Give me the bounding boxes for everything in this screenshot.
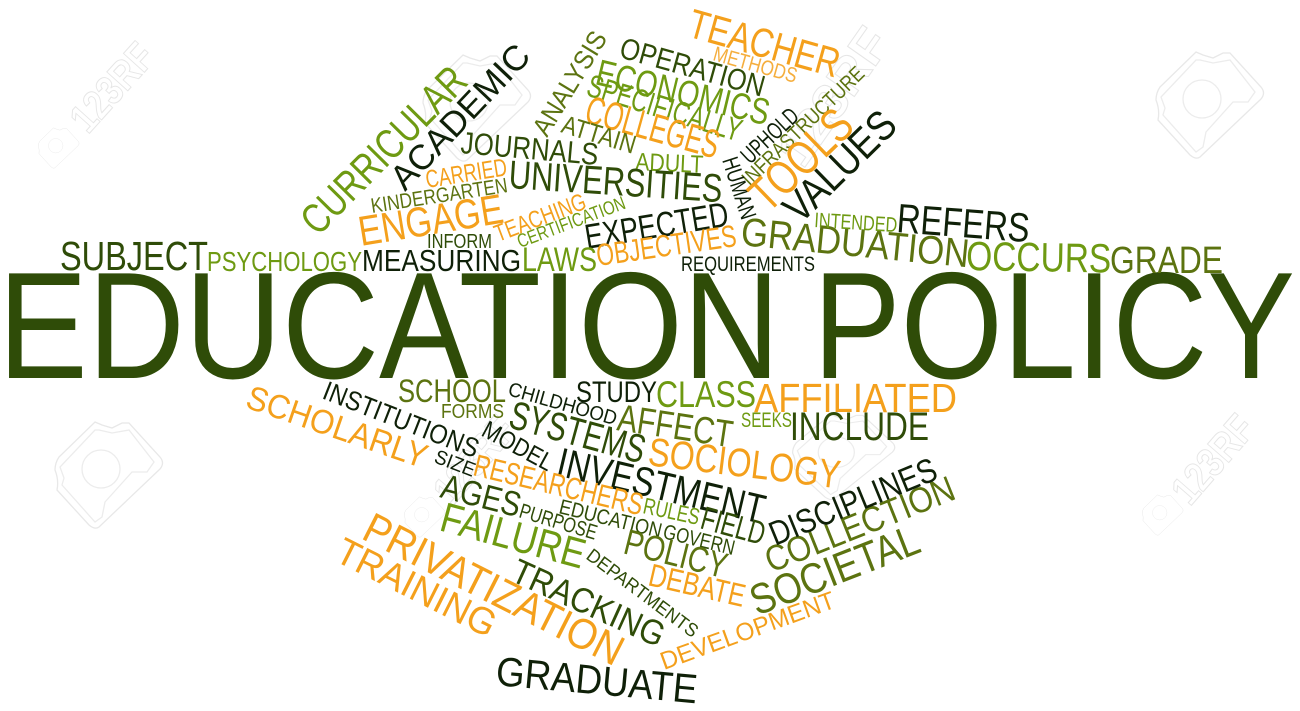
word: economics: ECONOMICS (592, 52, 774, 133)
word: colleges: COLLEGES (581, 88, 724, 167)
word: govern: GOVERN (661, 520, 737, 560)
word: analysis: ANALYSIS (527, 26, 613, 141)
word: intended: INTENDED (814, 209, 898, 237)
word: human: HUMAN (717, 154, 762, 222)
watermark: top centre (423, 55, 530, 161)
word: measuring: MEASURING (362, 243, 521, 278)
word: infrastructure: INFRASTRUCTURE (737, 62, 869, 191)
word: academic: ACADEMIC (383, 36, 538, 198)
word: scholarly: SCHOLARLY (241, 379, 432, 476)
word: journals: JOURNALS (459, 125, 600, 172)
word: expected: EXPECTED (582, 195, 731, 257)
watermark: top left: 123RF (61, 34, 164, 141)
word: departments: DEPARTMENTS (582, 545, 702, 642)
word: rules: RULES (641, 492, 702, 530)
word: affiliated: AFFILIATED (754, 375, 957, 421)
watermark: centre low (404, 407, 524, 537)
word: model: MODEL (477, 416, 558, 477)
word: ages: AGES (437, 467, 525, 525)
word: training: TRAINING (329, 531, 503, 646)
watermark: centre right (793, 415, 895, 500)
word: childhood: CHILDHOOD (506, 379, 619, 430)
word: methods: METHODS (711, 43, 800, 88)
word: systems: SYSTEMS (505, 393, 650, 472)
word: grade: GRADE (1110, 240, 1223, 282)
word: include: INCLUDE (790, 405, 929, 449)
word: collection: COLLECTION (759, 468, 961, 580)
word: carried: CARRIED (424, 153, 509, 194)
word: operation: OPERATION (616, 32, 769, 104)
word: laws: LAWS (522, 241, 597, 279)
word: investment: INVESTMENT (553, 439, 770, 533)
watermark: top left (38, 34, 164, 168)
word: curricular: CURRICULAR (291, 57, 476, 243)
word: societal: SOCIETAL (743, 516, 926, 625)
word: privatization: PRIVATIZATION (355, 504, 632, 675)
word: disciplines: DISCIPLINES (764, 451, 943, 553)
word: policy: POLICY (620, 521, 732, 586)
title: EDUCATION (0, 241, 780, 411)
word: requirements: REQUIREMENTS (681, 253, 815, 276)
word: kindergarten: KINDERGARTEN (369, 174, 509, 218)
word: class: CLASS (656, 374, 756, 415)
word: field: FIELD (697, 499, 770, 552)
word: school: SCHOOL (398, 373, 506, 409)
word: study: STUDY (576, 376, 657, 409)
word: objectives: OBJECTIVES (594, 218, 739, 273)
word: size: SIZE (431, 446, 478, 482)
word: failure: FAILURE (436, 493, 591, 577)
title (0, 241, 1295, 411)
word: subject: SUBJECT (60, 233, 208, 279)
word: specifically: SPECIFICALLY (583, 67, 746, 148)
word cloud: upper cluster (291, 0, 906, 273)
word: graduation: GRADUATION (739, 210, 971, 276)
watermark: bottom right (1142, 406, 1264, 535)
watermark: bottom right: 123RF (1162, 406, 1264, 513)
word: sociology: SOCIOLOGY (646, 430, 843, 497)
word: refers: REFERS (895, 195, 1031, 251)
watermark: far top right (1156, 52, 1264, 158)
word: occurs: OCCURS (966, 233, 1112, 282)
word: universities: UNIVERSITIES (507, 153, 724, 211)
word: adult: ADULT (635, 148, 704, 179)
word cloud: row above title (60, 195, 1223, 282)
word: psychology: PSYCHOLOGY (207, 246, 362, 277)
watermark: mid left (55, 422, 162, 528)
word: uphold: UPHOLD (736, 103, 805, 169)
word: teacher: TEACHER (684, 0, 845, 86)
word: affect: AFFECT (615, 397, 736, 456)
word: tracking: TRACKING (506, 552, 671, 655)
word: seeks: SEEKS (741, 409, 792, 432)
word: inform: INFORM (427, 231, 492, 253)
word: teaching: TEACHING (491, 188, 590, 248)
word: tools: TOOLS (739, 98, 864, 222)
watermark: top right of centre: 123RF (766, 17, 901, 176)
word: debate: DEBATE (645, 557, 749, 614)
word: attain: ATTAIN (558, 109, 640, 160)
word: institutions: INSTITUTIONS (319, 376, 483, 464)
word cloud: lower cluster (241, 373, 961, 711)
word: education: EDUCATION (557, 496, 664, 543)
word: engage: ENGAGE (355, 185, 507, 255)
word: values: VALUES (773, 101, 906, 231)
word: researchers: RESEARCHERS (470, 448, 647, 522)
word: certification: CERTIFICATION (514, 193, 629, 253)
word: development: DEVELOPMENT (656, 586, 839, 676)
watermarks (38, 17, 1264, 537)
word: forms: FORMS (441, 401, 504, 423)
watermark: centre low: 123RF (424, 407, 524, 513)
word: purpose: PURPOSE (517, 500, 600, 545)
